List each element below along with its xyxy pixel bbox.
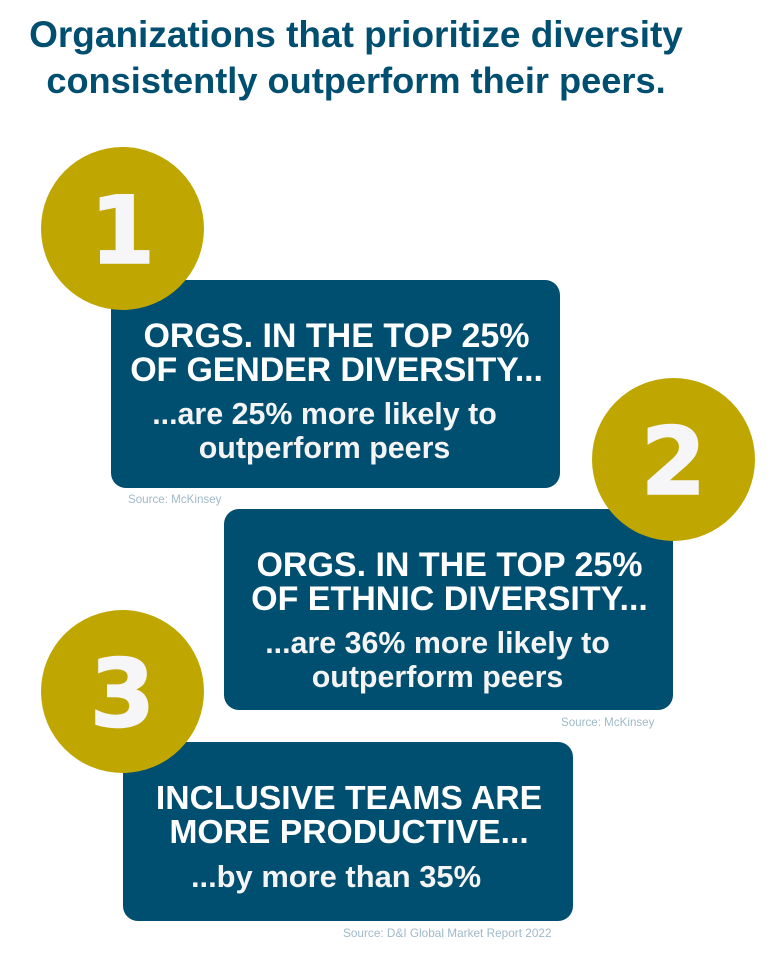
source 1: Source: McKinsey bbox=[128, 493, 221, 506]
panel 1 statistic bbox=[152, 397, 497, 465]
title: consistently outperform their peers. bbox=[46, 60, 666, 101]
panel 2 heading: OF ETHNIC DIVERSITY... bbox=[251, 580, 648, 618]
panel 2 statistic: ...are 36% more likely to bbox=[265, 626, 610, 660]
panel 2: ethnic diversity bbox=[224, 509, 673, 710]
panel 1 statistic: ...are 25% more likely to bbox=[152, 397, 497, 431]
panel 2 statistic bbox=[265, 626, 610, 694]
panel 1 heading: ORGS. IN THE TOP 25% bbox=[143, 317, 530, 355]
badge 3 bbox=[41, 610, 204, 773]
panel 1 heading bbox=[130, 317, 543, 389]
panel 3 heading: INCLUSIVE TEAMS ARE bbox=[156, 779, 542, 817]
panel 3 heading: MORE PRODUCTIVE... bbox=[169, 813, 529, 851]
panel 1 statistic: outperform peers bbox=[199, 431, 450, 465]
panel 2 heading: ORGS. IN THE TOP 25% bbox=[256, 546, 643, 584]
panel 1 heading: OF GENDER DIVERSITY... bbox=[130, 351, 543, 389]
source 2: Source: McKinsey bbox=[561, 716, 654, 729]
panel 3 heading bbox=[156, 779, 542, 851]
panel 3: inclusive teams bbox=[123, 742, 573, 921]
panel 2 heading bbox=[251, 546, 648, 618]
badge 1 bbox=[41, 147, 204, 310]
title bbox=[29, 14, 683, 101]
source 3: Source: D&I Global Market Report 2022 bbox=[343, 926, 552, 940]
number 2: 2 bbox=[641, 408, 706, 517]
number 3: 3 bbox=[90, 640, 155, 749]
number 1: 1 bbox=[90, 177, 155, 286]
panel 1: gender diversity bbox=[111, 280, 560, 488]
panel 2 statistic: outperform peers bbox=[312, 660, 563, 694]
badge 2 bbox=[592, 378, 755, 541]
title: Organizations that prioritize diversity bbox=[29, 14, 683, 55]
panel 3 statistic: ...by more than 35% bbox=[191, 859, 481, 894]
